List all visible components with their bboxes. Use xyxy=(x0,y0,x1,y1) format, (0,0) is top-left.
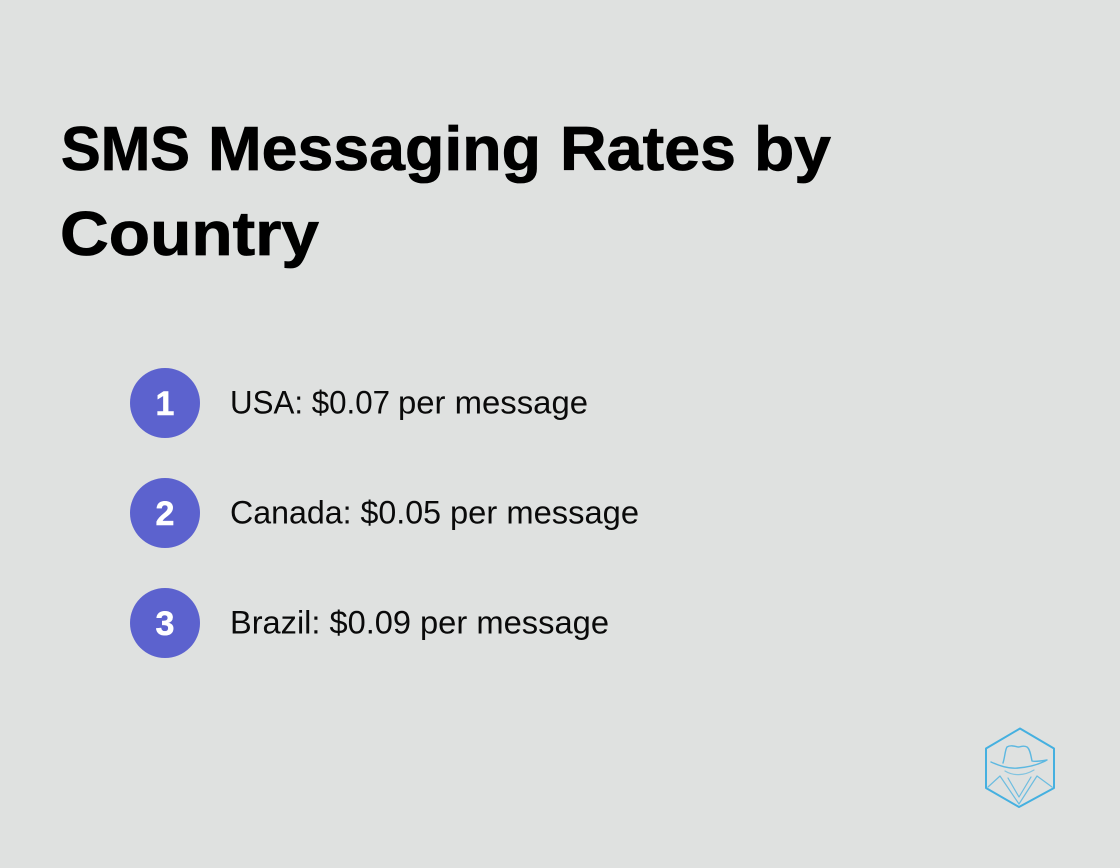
list item 3: Brazil: Brazil: $0.09 xyxy=(230,604,411,640)
title: SMS xyxy=(61,115,190,184)
list item 1: USA: per message xyxy=(398,384,588,420)
list item 1: USA: USA: $0.07 xyxy=(230,384,390,420)
list item 2: Canada: 2 xyxy=(156,495,174,533)
list item 1: USA xyxy=(130,368,588,438)
list item 1: USA: 1 xyxy=(156,385,174,423)
title: Messaging xyxy=(208,115,541,184)
list item 3: Brazil xyxy=(130,588,609,658)
list item 2: Canada: per message xyxy=(450,494,639,530)
list item 2: Canada: Canada: $0.05 xyxy=(230,494,441,530)
title xyxy=(60,115,832,269)
icon: spy logo hexagon xyxy=(986,728,1054,807)
list item 2: Canada xyxy=(130,478,639,548)
list item 3: Brazil: per message xyxy=(420,604,609,640)
title: Country xyxy=(60,200,320,269)
list item 3: Brazil: 3 xyxy=(156,605,174,643)
title: by xyxy=(754,115,832,184)
title: Rates xyxy=(560,115,736,184)
